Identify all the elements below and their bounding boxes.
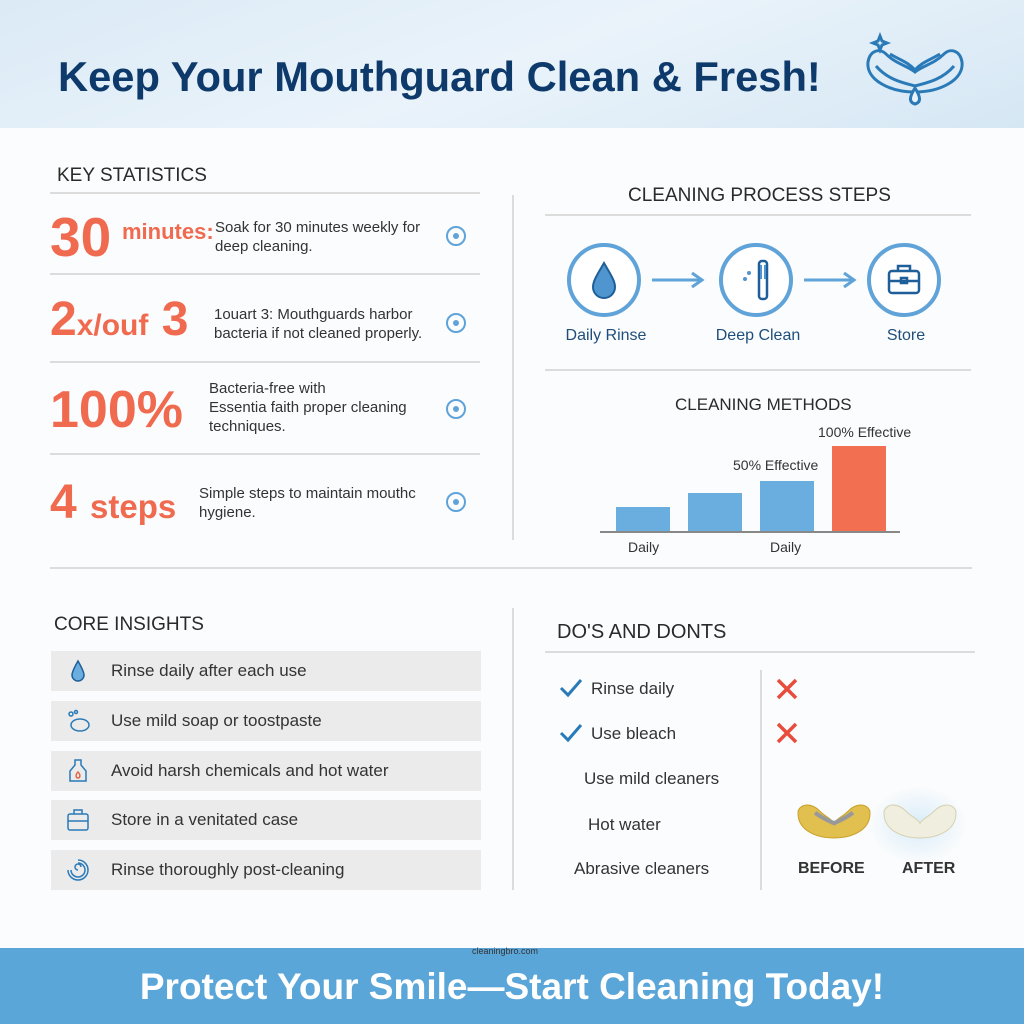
bar chart: cleaning methods: Daily [628, 539, 659, 555]
process steps: Daily Rinse [566, 327, 646, 344]
do's list: Use mild cleaners [584, 769, 719, 788]
footer source: cleaningbro.com [472, 946, 538, 956]
insights list [51, 651, 481, 890]
stat 2 [50, 293, 466, 346]
before/after images: AFTER [902, 860, 955, 877]
bar chart: cleaning methods: 50% Effective [733, 457, 818, 473]
insights list: Rinse daily after each use [111, 661, 307, 680]
before/after images: BEFORE [798, 860, 865, 877]
bar chart: cleaning methods: CLEANING METHODS [675, 395, 852, 414]
insights list: Store in a venitated case [111, 810, 298, 829]
icon: mouthguard [866, 32, 964, 106]
header band [0, 0, 1024, 128]
do's list: Use bleach [591, 724, 676, 743]
stat 3 [50, 380, 466, 439]
stat 4: 4 steps [50, 476, 176, 529]
do's list: Hot water [588, 815, 661, 834]
insights list: Rinse thoroughly post-cleaning [111, 860, 344, 879]
stat 3: 100% [50, 381, 183, 439]
heading: key statistics: KEY STATISTICS [57, 165, 207, 186]
stat 4: hygiene. [199, 504, 256, 521]
insights list: Use mild soap or toostpaste [111, 711, 322, 730]
do's list: Abrasive cleaners [574, 859, 709, 878]
stat 2: 1ouart 3: Mouthguards harbor [214, 306, 412, 323]
stat 3: Essentia faith proper cleaning [209, 399, 407, 416]
do's list [560, 679, 719, 878]
don'ts marks [776, 678, 798, 744]
stat 4 [50, 476, 466, 529]
stat 4: Simple steps to maintain mouthc [199, 485, 416, 502]
footer banner [0, 948, 1024, 1024]
do's list: Rinse daily [591, 679, 674, 698]
bar chart: cleaning methods [600, 395, 911, 555]
heading: cleaning process steps: CLEANING PROCESS STEPS [628, 185, 891, 206]
stat 3: Bacteria-free with [209, 380, 326, 397]
stat 2: 2x/ouf 3 [50, 293, 188, 346]
stat 1 [50, 206, 466, 268]
before/after images [798, 794, 956, 877]
bar chart: cleaning methods: 100% Effective [818, 424, 911, 440]
footer banner: Protect Your Smile—Start Cleaning Today! [140, 966, 884, 1007]
title: Keep Your Mouthguard Clean & Fresh! [58, 53, 821, 100]
bar chart: cleaning methods: Daily [770, 539, 801, 555]
stat 1: minutes: [122, 219, 214, 244]
heading: core insights: CORE INSIGHTS [54, 614, 204, 635]
stat 2: bacteria if not cleaned properly. [214, 325, 422, 342]
process steps: Deep Clean [716, 327, 800, 344]
insights list: Avoid harsh chemicals and hot water [111, 761, 389, 780]
stat 1: 30 [50, 206, 111, 268]
stat 1: deep cleaning. [215, 238, 313, 255]
heading: do's and donts: DO'S AND DONTS [557, 621, 726, 643]
process steps [566, 243, 941, 344]
stat 3: techniques. [209, 418, 286, 435]
process steps: Store [887, 327, 925, 344]
stat 1: Soak for 30 minutes weekly for [215, 219, 420, 236]
